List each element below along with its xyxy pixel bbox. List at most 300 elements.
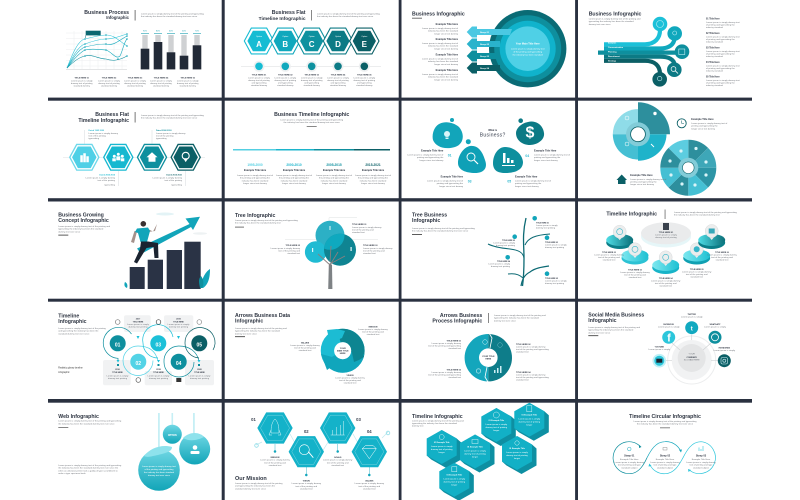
bar chart: 90% xyxy=(143,30,147,32)
chart captions: standard dummy xyxy=(101,84,118,88)
intro text: the industry has been the standard dummy text ever since xyxy=(58,422,115,426)
chart captions: Lorem ipsum is simply xyxy=(124,80,147,82)
line chart xyxy=(66,31,128,70)
hanging balls: dummy text ever since xyxy=(148,474,171,477)
arrow labels: Lorem ipsum is simply dummy xyxy=(290,344,321,347)
quarter pie xyxy=(613,102,670,161)
title list: of printing and typesetting the xyxy=(706,38,735,41)
intro text: the industry has been the standard dummy text ever since xyxy=(284,121,341,124)
callouts: typesetting xyxy=(156,137,167,140)
process labels: text of the printing and typesetting xyxy=(428,344,462,348)
arrow labels xyxy=(290,326,389,384)
disc labels: text of the printing and xyxy=(711,256,734,259)
example text blocks: 03 xyxy=(468,180,472,184)
timeline columns: the printing and typesetting the xyxy=(358,177,389,180)
title list: of printing and typesetting the xyxy=(706,67,735,70)
branching ribbons: Analysis xyxy=(608,41,617,44)
intro text: the industry has been the standard dummy text ever since xyxy=(317,15,374,18)
callouts: Lorem ipsum is simply dummy xyxy=(86,176,116,180)
intro text: typesetting the industry has been the standard xyxy=(494,317,540,320)
chart captions: Lorem ipsum is simply xyxy=(150,80,173,82)
s-curve path xyxy=(613,442,715,474)
chart captions xyxy=(71,76,199,88)
panel: timeline circles xyxy=(48,302,222,399)
panel: business growing concept xyxy=(48,202,222,299)
3d hexagons: longer xyxy=(514,457,520,460)
hanging balls xyxy=(138,413,210,491)
intro text xyxy=(634,420,697,426)
step arrows: Steep 03 xyxy=(480,55,490,58)
chart captions: standard dummy xyxy=(74,84,91,88)
intro text: Lorem ipsum is simply dummy text of the printing and xyxy=(589,18,641,20)
process labels: text of the printing and typesetting xyxy=(428,374,462,376)
example text blocks: Example Title Here xyxy=(441,176,464,178)
split circle: YOUR TITLE xyxy=(482,356,495,358)
numbered circles: 04 xyxy=(176,361,182,367)
panel: web infographic xyxy=(48,403,222,500)
side note: infographic xyxy=(58,371,70,374)
3d hexagons: Lorem ipsum is simply xyxy=(431,445,453,448)
disc labels: text of the printing and xyxy=(624,274,647,276)
hanging balls: of the printing and typesetting xyxy=(145,468,174,471)
chart captions: TITLE HERE 04 xyxy=(154,76,169,80)
title xyxy=(58,212,109,224)
timeline columns: industry has been standard xyxy=(321,179,348,182)
3d hexagons: 01 Example Title xyxy=(509,447,526,450)
card text: 2017 xyxy=(136,318,141,320)
home icon xyxy=(616,174,627,184)
tree labels: text of the printing and xyxy=(352,228,374,232)
example text blocks: printing and typesetting the xyxy=(534,156,561,159)
example text blocks: longer since text dummy xyxy=(439,185,464,188)
intro text: dummy text ever since xyxy=(235,332,258,335)
bar chart: 80% xyxy=(156,30,160,32)
intro text xyxy=(58,327,106,335)
step contents: text of printing and type xyxy=(690,464,713,467)
title: Business Infographic xyxy=(589,12,642,18)
clock text: printing and typesetting the xyxy=(691,125,718,128)
hexagon captions: VISION xyxy=(303,480,310,482)
intro text: Lorem ipsum is simply dummy text of the printing and xyxy=(235,327,287,330)
branching tree xyxy=(488,218,550,286)
clock text xyxy=(691,118,728,130)
person xyxy=(131,221,158,264)
tree xyxy=(305,221,356,289)
tree labels xyxy=(271,224,393,255)
step contents xyxy=(615,446,717,469)
timeline columns: the printing and typesetting the xyxy=(279,177,310,180)
card text: Lorem ipsum is simply xyxy=(107,374,129,378)
split circle: HERE xyxy=(485,359,492,361)
3d hexagons: Lorem ipsum is simply xyxy=(464,450,487,452)
branch labels: dummy text printing xyxy=(496,244,516,247)
callouts: typesetting xyxy=(171,184,183,186)
hanging balls: the industry has been standard xyxy=(144,471,175,474)
hexagon captions: Lorem ipsum is simply dummy xyxy=(355,482,385,485)
hanging balls: Lorem ipsum is simply dummy text xyxy=(142,465,176,468)
intro text: the industry has been the standard dummy text xyxy=(235,222,281,225)
marker captions: Lorem ipsum is simply xyxy=(274,76,297,80)
disc labels: text of the printing and xyxy=(598,256,621,259)
chart captions: Lorem ipsum is simply xyxy=(98,80,121,82)
step numbers xyxy=(251,417,372,434)
example text blocks: Lorem ipsum is simply dummy text of xyxy=(422,42,458,45)
hexagon captions: text of the printing and xyxy=(295,485,318,488)
chart captions: standard dummy xyxy=(127,84,144,88)
3d hexagons: 01 Example Title xyxy=(446,474,463,477)
intro text: the industry has been the standard dummy text ever since xyxy=(412,230,469,233)
concentric circles: Lorem ipsum is simply dummy text xyxy=(511,48,545,50)
chart captions: TITLE HERE 01 xyxy=(74,78,90,80)
arrow labels: standard text xyxy=(299,349,312,352)
social labels: Lorem ipsum is simply xyxy=(648,348,671,351)
step contents: Lorem ipsum is simply dummy xyxy=(615,461,645,464)
marker captions: TITLE HERE 04 xyxy=(331,74,346,76)
example text blocks: longer since text dummy xyxy=(434,78,459,81)
intro text: dummy text ever since xyxy=(589,23,611,26)
tree labels: Lorem ipsum is simply dummy xyxy=(352,226,382,229)
branch labels: Lorem ipsum is simply xyxy=(536,224,559,227)
title: Timeline Infographic xyxy=(259,16,306,22)
central disc: Lorem ipsum is simply xyxy=(655,234,678,236)
title: Timeline Circular Infographic xyxy=(629,414,701,420)
intro text: Lorem ipsum is simply dummy text of the printing and typesetting xyxy=(280,118,344,122)
process labels: Lorem ipsum is simply dummy xyxy=(516,346,546,348)
heading: What is xyxy=(488,129,498,132)
intro text: standard dummy text ever since xyxy=(58,332,90,335)
branch labels: TITLE HERE 04 xyxy=(497,260,510,263)
process labels: standard text xyxy=(448,347,461,350)
branching ribbons: Communication xyxy=(608,46,624,49)
process labels: TITLE HERE 04 xyxy=(516,371,531,374)
panel: timeline circular infographic xyxy=(578,403,752,500)
title list: 01 Title Here xyxy=(706,18,720,20)
3d hexagons: Lorem ipsum is simply xyxy=(485,423,508,426)
hexagon icons xyxy=(69,144,201,171)
3d hexagons: Lorem ipsum is simply xyxy=(443,478,466,481)
central disc: TITLE HERE 01 xyxy=(659,232,674,234)
tree labels: TITLE HERE 03 xyxy=(363,245,378,247)
title xyxy=(58,314,87,325)
social icons: f xyxy=(667,332,671,344)
chart captions: TITLE HERE 05 xyxy=(180,78,196,80)
hexagon captions: text of the printing and xyxy=(264,461,287,464)
disc labels: Lorem ipsum is simply dummy xyxy=(594,254,625,256)
timeline columns: Example Title Here xyxy=(283,169,306,172)
title xyxy=(78,112,129,124)
home text: Lorem ipsum is simply dummy text of xyxy=(630,178,667,181)
tree labels: standard text xyxy=(287,252,300,255)
social labels: FACEBOOK xyxy=(663,323,675,326)
callouts: text of the printing xyxy=(98,179,116,182)
arrow labels: Lorem ipsum is simply dummy xyxy=(335,376,366,380)
timeline columns: 2005-2015 xyxy=(326,163,342,167)
marker captions: and typesetting xyxy=(304,82,320,84)
title xyxy=(259,10,306,22)
chart captions: dummy text of printing xyxy=(124,82,147,85)
process labels: text of the printing and typesetting xyxy=(516,376,550,379)
clock text: longer since text dummy xyxy=(691,127,716,130)
example text blocks: Lorem ipsum is simply dummy text of xyxy=(534,154,570,156)
process labels: Lorem ipsum is simply dummy xyxy=(432,371,462,374)
timeline columns: Example Title Here xyxy=(362,169,385,172)
process labels: text of the printing and typesetting xyxy=(516,348,550,351)
marker captions: Lorem ipsum is simply xyxy=(327,76,350,80)
example text blocks: industry has been the standard xyxy=(428,45,459,48)
side note: Realistic glossy timeline xyxy=(58,366,83,370)
marker captions: dummy text of printing xyxy=(301,79,323,82)
example text blocks: Lorem ipsum is simply dummy text of xyxy=(515,180,551,182)
title list: of printing and typesetting the xyxy=(706,81,735,84)
hexagon options A to E: Option xyxy=(309,35,315,38)
example text blocks: 04 xyxy=(525,154,529,158)
concentric circles: Your Main Title Here xyxy=(516,42,540,46)
home text xyxy=(630,174,667,186)
branch labels: Lorem ipsum is simply xyxy=(545,244,568,246)
callouts xyxy=(86,129,186,186)
title list: industry standard xyxy=(706,69,724,72)
social labels: Lorem ipsum is simply xyxy=(713,349,736,352)
intro text xyxy=(588,326,641,334)
arrow labels: standard text xyxy=(344,382,357,384)
branching ribbons xyxy=(598,30,682,74)
timeline columns: longer since text dummy xyxy=(322,182,347,185)
callouts: text of the printing xyxy=(156,134,174,138)
title list: industry standard xyxy=(706,55,724,58)
step contents: Lorem ipsum is simply dummy xyxy=(686,461,717,464)
arrow labels: VALUES xyxy=(301,342,310,344)
title: Process Infographic xyxy=(432,318,482,324)
branch labels xyxy=(488,222,568,285)
panel: business process infographic xyxy=(48,0,222,98)
example text blocks: printing and typesetting the xyxy=(515,182,542,185)
intro text: Lorem ipsum is simply dummy text of the printing and xyxy=(494,314,546,317)
intro text xyxy=(235,327,287,335)
title: Timeline Infographic xyxy=(412,414,463,420)
social labels: WHATSAPP xyxy=(710,323,721,326)
marker captions: dummy text of printing xyxy=(327,79,350,82)
intro text: Lorem ipsum is simply dummy text of the printing and typesetting xyxy=(58,420,122,422)
timeline columns: Lorem ipsum is simply dummy text of xyxy=(355,174,391,177)
chart captions: TITLE HERE 02 xyxy=(102,78,117,80)
title: Arrows Business Data xyxy=(235,313,290,319)
card text: TITLE HERE xyxy=(153,372,165,374)
callouts: Lorem ipsum is simply dummy xyxy=(88,132,119,135)
marker captions: standard dummy xyxy=(277,84,294,87)
centre text: HERE xyxy=(340,353,346,355)
card text: TITLE HERE xyxy=(112,372,124,374)
process labels: Lorem ipsum is simply dummy xyxy=(432,342,462,345)
hexagon options A to E: A xyxy=(256,40,262,49)
clock icon xyxy=(677,119,686,128)
example text blocks: printing and typesetting the xyxy=(437,182,464,185)
marker captions: and typesetting xyxy=(252,82,267,84)
title: Tree Infographic xyxy=(235,213,275,219)
numbered circles: 03 xyxy=(156,342,161,348)
intro text xyxy=(235,219,299,225)
chart captions: standard dummy xyxy=(180,84,197,88)
intro text: Lorem ipsum is simply dummy text of the printing and typesetting xyxy=(317,12,381,16)
hexagon captions: standard text xyxy=(269,464,282,467)
intro text xyxy=(141,114,205,120)
marker captions: Lorem ipsum is simply xyxy=(353,76,376,80)
intro text: Lorem ipsum is simply dummy text of the printing and xyxy=(58,225,111,228)
marker captions: TITLE HERE 02 xyxy=(278,74,293,76)
intro text: Lorem ipsum is simply dummy text of the printing and typesetting xyxy=(141,12,205,16)
side note xyxy=(58,366,83,374)
panel: arrows business data xyxy=(225,302,399,399)
card text: 2019 xyxy=(176,318,182,320)
callouts: Lorem ipsum is simply dummy xyxy=(156,132,186,135)
branch labels: TITLE HERE 05 xyxy=(545,278,558,280)
title xyxy=(432,313,482,324)
title: Business Growing xyxy=(58,212,104,218)
hexagon captions: standard text xyxy=(331,464,344,467)
social icons: t xyxy=(691,326,693,332)
panel: timeline hexagons xyxy=(402,403,575,500)
marker captions: Lorem ipsum is simply xyxy=(248,76,271,80)
process labels: TITLE HERE 02 xyxy=(516,344,531,346)
intro text: dummy text xyxy=(412,424,424,428)
intro text xyxy=(674,211,738,217)
panel: pie charts xyxy=(578,101,752,198)
eight segment pie xyxy=(660,140,716,196)
3d hexagons: 01 Example Title xyxy=(467,446,484,448)
social labels: Lorem ipsum is simply xyxy=(681,316,703,319)
intro text: typesetting the industry has been the standard xyxy=(235,330,281,333)
tree labels: text of the printing and xyxy=(278,250,301,252)
social labels: Lorem ipsum is simply xyxy=(704,326,727,329)
disc labels: TITLE HERE 05 xyxy=(690,269,704,271)
title: Our Mission xyxy=(235,476,267,482)
hexagon captions: standard text xyxy=(300,488,313,490)
panel: timeline discs xyxy=(578,202,752,299)
social labels: INSTAGRAM xyxy=(719,346,730,350)
arrow labels: standard text xyxy=(367,333,380,336)
home text: printing and typesetting the xyxy=(630,180,657,184)
timeline columns: industry has been standard xyxy=(360,179,387,182)
hexagon options A to E xyxy=(244,28,380,54)
example text blocks: Example Title Here xyxy=(534,150,557,152)
body text: make a type specimen book xyxy=(58,472,86,475)
intro text: and typesetting the industry has been the xyxy=(235,485,276,488)
title xyxy=(588,312,644,324)
marker captions: and typesetting xyxy=(278,82,293,84)
title: Infographic xyxy=(58,319,87,325)
clock text: Lorem ipsum is simply dummy text of xyxy=(691,122,728,125)
title list: 02 Title Here xyxy=(706,32,720,35)
title list: industry standard xyxy=(706,26,724,29)
tree labels: text of the printing and xyxy=(363,250,385,252)
title list: Lorem ipsum is simply dummy text xyxy=(706,79,740,82)
callouts: typesetting xyxy=(88,137,100,140)
marker captions: standard dummy xyxy=(251,84,268,87)
grey text cards xyxy=(103,315,214,385)
3d hexagons: 01 Example Title xyxy=(434,441,450,444)
step contents: Lorem ipsum is simply dummy xyxy=(650,461,681,464)
intro text: Lorem ipsum is simply dummy text of the printing and typesetting xyxy=(141,114,205,117)
hexagon options A to E: C xyxy=(309,40,315,49)
company circle: COMPANY xyxy=(686,356,698,359)
disc labels: standard text xyxy=(629,276,642,279)
3d hexagons: dummy text of printing xyxy=(519,421,541,424)
intro text: the industry has been the standard dummy text ever since xyxy=(141,15,198,18)
marker captions: dummy text of printing xyxy=(354,79,376,82)
branch labels: TITLE HERE 02 xyxy=(502,240,515,242)
step arrows: Steep 01 xyxy=(480,31,490,34)
step contents: Example Title Here xyxy=(692,458,711,461)
marker captions: dummy text of printing xyxy=(248,79,271,82)
branching ribbons: Strategy xyxy=(608,59,617,62)
callouts: Dated 2015 2021 xyxy=(166,174,183,176)
step numbers: 04 xyxy=(367,429,372,434)
card text: Lorem ipsum is simply xyxy=(127,323,150,326)
3d hexagons: dummy text of printing xyxy=(464,452,487,456)
timeline columns: Lorem ipsum is simply dummy text of xyxy=(237,174,273,177)
intro text xyxy=(412,420,464,428)
hexagon captions: standard text xyxy=(363,488,376,490)
card text: dummy text printing xyxy=(128,326,148,328)
callouts: Dated 2005 2015 xyxy=(99,174,116,176)
intro text: typesetting the industry has been the standard xyxy=(412,422,458,425)
branching ribbons: Planning xyxy=(608,51,617,53)
stems and dots xyxy=(274,444,370,476)
intro text xyxy=(235,482,283,490)
tree labels: standard text xyxy=(352,231,365,234)
heading: Business? xyxy=(480,132,506,138)
hexagon options A to E: D xyxy=(335,40,341,49)
intro text xyxy=(412,227,476,233)
card text: dummy text printing xyxy=(190,377,210,380)
intro text: dummy text ever since xyxy=(588,331,611,334)
intro text: Lorem ipsum is simply dummy text of the printing and typesetting xyxy=(235,219,299,222)
marker captions xyxy=(248,74,376,87)
marker captions: TITLE HERE 03 xyxy=(304,74,320,76)
timeline columns: 2000-2010 xyxy=(286,163,302,167)
blob icons xyxy=(433,118,544,173)
title xyxy=(412,212,447,224)
example text blocks: Example Title Here xyxy=(436,69,459,72)
intro text xyxy=(58,420,122,426)
branch labels: dummy text printing xyxy=(545,282,565,285)
concentric circles xyxy=(489,10,566,87)
marker captions: dummy text of printing xyxy=(275,79,297,82)
timeline columns: Lorem ipsum is simply dummy text of xyxy=(316,174,352,177)
card text: dummy text printing xyxy=(149,377,169,380)
hexagon options A to E: E xyxy=(362,40,368,49)
intro text xyxy=(141,12,205,18)
hexagon captions: Lorem ipsum is simply dummy xyxy=(260,459,291,462)
process labels: Lorem ipsum is simply dummy xyxy=(516,374,546,376)
disc labels: text of the printing and xyxy=(686,273,708,276)
title: Business Process xyxy=(84,10,129,16)
process labels: standard text xyxy=(448,376,461,379)
title list: of printing and typesetting the xyxy=(706,24,735,26)
tree labels: Lorem ipsum is simply dummy xyxy=(363,247,393,250)
example text blocks: longer since text dummy xyxy=(534,159,559,162)
intro text: typesetting the industry has been the standard xyxy=(589,20,634,23)
chart captions: TITLE HERE 03 xyxy=(128,78,143,80)
intro text: Lorem ipsum is simply dummy text of the printing and xyxy=(412,420,464,422)
title list: industry standard xyxy=(706,84,724,87)
title xyxy=(84,10,130,20)
timeline columns xyxy=(237,163,391,185)
title: Business Timeline Infographic xyxy=(274,112,349,118)
disc labels: TITLE HERE 03 xyxy=(628,270,642,272)
title: Web Infographic xyxy=(58,414,99,420)
step contents: standard subject xyxy=(621,466,638,469)
title xyxy=(235,313,290,324)
